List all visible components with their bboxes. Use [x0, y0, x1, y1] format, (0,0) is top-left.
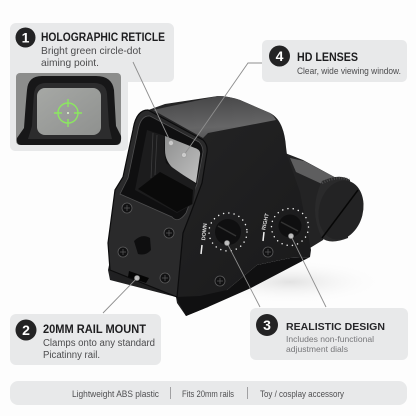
- heading: HD lenses: HD LENSES: [297, 50, 358, 64]
- ground shadow: [195, 260, 385, 304]
- panel: 20mm rail mount: [10, 314, 161, 365]
- heading: realistic design: REALISTIC DESIGN: [286, 321, 385, 333]
- description: reticle: Bright green circle-dot: [41, 45, 141, 57]
- front screws: [118, 203, 273, 286]
- badge 2: [16, 320, 36, 340]
- label: DOWN: DOWN: [201, 223, 209, 241]
- panel: holographic reticle: [10, 23, 174, 151]
- badge 4: 4: [276, 48, 284, 64]
- panel: realistic design: [250, 308, 408, 360]
- dial: down: [201, 213, 247, 254]
- rear housing: [285, 153, 345, 248]
- window opening: [135, 130, 196, 213]
- post: [134, 236, 151, 254]
- rail notch: [128, 271, 149, 283]
- badge 1: 1: [22, 30, 30, 46]
- description: lenses: Clear, wide viewing window.: [297, 66, 401, 77]
- rear knob: [312, 176, 370, 244]
- leader lines: [103, 62, 326, 313]
- main body: [108, 96, 311, 316]
- reticle: [54, 99, 82, 127]
- description: design: adjustment dials: [286, 344, 348, 354]
- badge 3: 3: [263, 317, 271, 333]
- panel: HD lenses: [262, 40, 407, 82]
- front plate: [108, 110, 207, 297]
- footer strip: [10, 381, 407, 405]
- sight illustration: [108, 96, 370, 316]
- heading: rail mount: 20MM RAIL MOUNT: [43, 324, 146, 336]
- description: design: Includes non-functional: [286, 334, 374, 344]
- window rim: [120, 116, 203, 220]
- badge 1: [16, 28, 36, 48]
- feature: accessory: Toy / cosplay accessory: [260, 389, 344, 400]
- inset: reticle close-up: [16, 73, 121, 145]
- lens: [165, 136, 200, 183]
- description: reticle: aiming point.: [41, 57, 99, 69]
- badge 4: [269, 46, 290, 66]
- base rail: [176, 257, 310, 316]
- top face: [153, 96, 276, 138]
- description: rail mount: Picatinny rail.: [43, 350, 100, 361]
- label: RIGHT: RIGHT: [261, 212, 271, 231]
- feature: material: Lightweight ABS plastic: [72, 389, 159, 400]
- badge 2: 2: [22, 322, 30, 338]
- heading: holographic reticle: HOLOGRAPHIC RETICLE: [41, 32, 165, 44]
- badge 3: [256, 314, 278, 336]
- description: rail mount: Clamps onto any standard: [43, 338, 155, 349]
- dial: right: [261, 208, 308, 246]
- feature: rails: Fits 20mm rails: [182, 389, 234, 400]
